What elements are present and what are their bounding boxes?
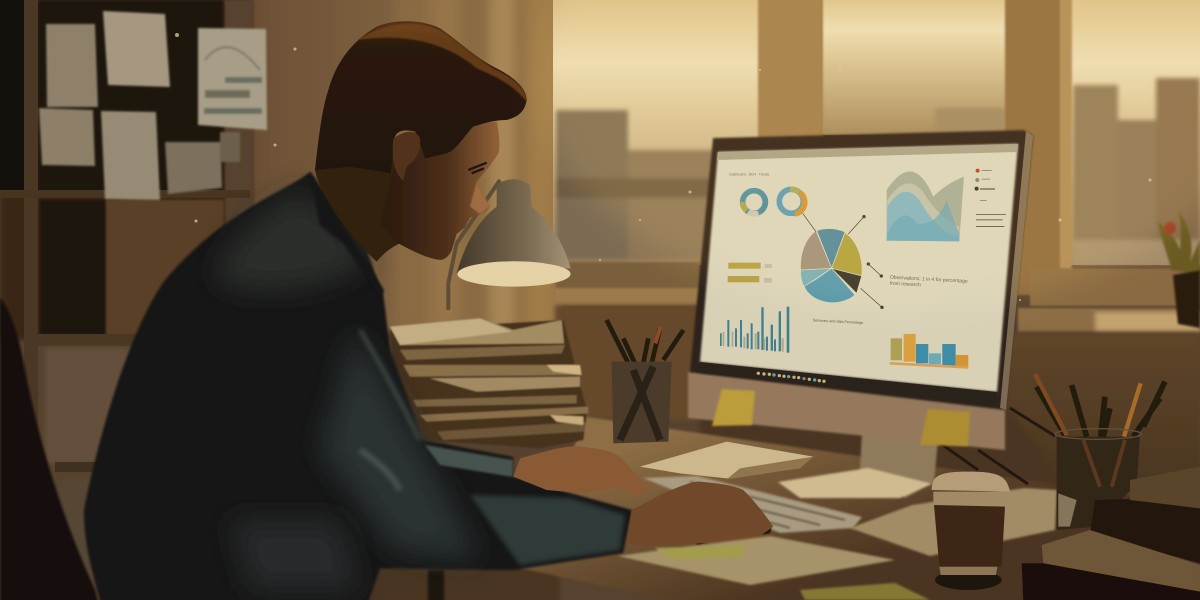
pencil cup on the right (1035, 374, 1165, 530)
open notebook on the desk (640, 442, 813, 479)
dust particles (175, 33, 1152, 301)
taskbar icons (757, 372, 826, 383)
desk leg (428, 570, 444, 600)
pie chart callout lines (803, 213, 883, 309)
dashboard on the screen (720, 169, 1006, 383)
keyboard (643, 476, 862, 533)
window frames and sills (555, 0, 1200, 492)
callout text: Observations: 1 in 4 for percentage (890, 275, 968, 285)
man: far hand on keyboard (513, 446, 650, 497)
pinned papers (39, 11, 267, 200)
curtain (395, 0, 557, 330)
area chart (887, 172, 964, 241)
legend list (975, 169, 1006, 227)
man: near hand on keyboard (627, 482, 773, 547)
monitor body (688, 130, 1033, 450)
office chair (0, 298, 100, 600)
ear (393, 132, 420, 181)
monitor cables (940, 408, 1055, 484)
heading: dashboard title: Dashboard · 2024 · Trends (729, 172, 769, 176)
window panes with city skyline (553, 0, 1200, 265)
pencil holder near the lamp (607, 320, 683, 443)
dashboard on the screen: from research (890, 281, 921, 288)
coffee cup (932, 472, 1010, 590)
column chart right (890, 334, 968, 369)
neck (315, 127, 440, 262)
caption under pie: Summary and data Percentage (813, 318, 863, 325)
desk lamp (448, 179, 571, 310)
desk surface (520, 417, 1200, 600)
warm light overlay from the windows (540, 0, 1200, 310)
man: torso and arm in dark shirt (84, 172, 632, 600)
eye and brow (468, 163, 487, 173)
papers on the desk (618, 488, 1057, 600)
pie chart (800, 229, 862, 303)
plant on the right sill (1158, 210, 1200, 328)
man: head (315, 21, 527, 262)
donut chart one (743, 191, 765, 214)
book stack (1022, 467, 1200, 600)
hair rim light (358, 24, 527, 102)
donut chart two (779, 189, 805, 214)
face (380, 122, 499, 260)
panel: shelf and pinboard (0, 0, 253, 578)
sticky notes on the monitor (712, 389, 970, 446)
monitor stand (778, 432, 938, 498)
column chart left (720, 307, 789, 353)
lit nose (470, 182, 490, 214)
hair (315, 21, 527, 173)
horizontal bar chart (728, 263, 772, 283)
paper stack (390, 318, 588, 448)
